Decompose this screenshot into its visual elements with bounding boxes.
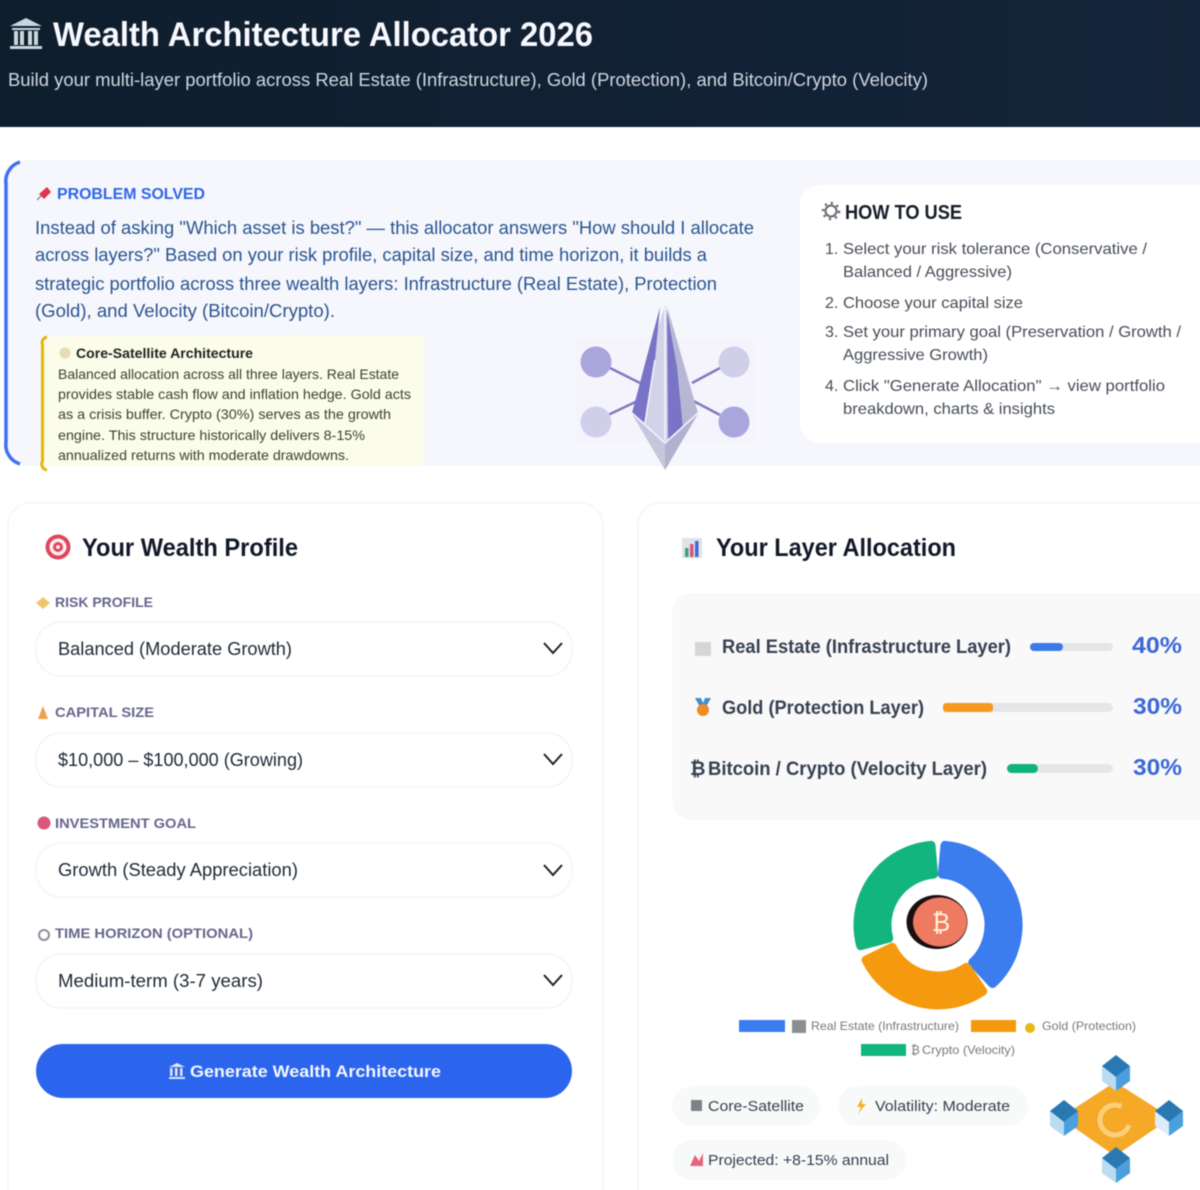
field: time horizon: Medium-term (3-7 years) (58, 971, 263, 991)
field: risk profile: RISK PROFILE (55, 594, 153, 610)
chart legend (739, 1019, 1136, 1057)
problem description: (Gold), and Velocity (Bitcoin/Crypto). (35, 301, 335, 321)
instructions list: 1. (825, 241, 838, 258)
instructions list: Set your primary goal (Preservation / Growth / (843, 324, 1182, 341)
cube: left (1050, 1100, 1078, 1136)
icon: blockchain coin (1050, 1055, 1183, 1183)
field: risk profile (36, 594, 572, 676)
icon: target (46, 534, 70, 560)
field: risk profile: Balanced (Moderate Growth) (58, 639, 292, 659)
panel: problem solved (4, 160, 1200, 470)
callout: core-satellite architecture: as a crisis buffer. Crypto (30%) serves as the growth (58, 406, 391, 422)
subtitle: Build your multi-layer portfolio across Real Estate (Infrastructure), Gold (Protection), and Bitcoin/Crypto (Velocity) (8, 70, 928, 90)
chart legend: Crypto (Velocity) (922, 1043, 1015, 1057)
icon: classical building (10, 18, 42, 49)
tag: volatility (838, 1086, 1028, 1126)
instructions list: Select your risk tolerance (Conservative / (843, 241, 1148, 258)
cube: bottom (1102, 1147, 1130, 1183)
field: investment goal: Growth (Steady Appreciation) (58, 860, 298, 880)
card: how to use (800, 185, 1200, 443)
cube: top (1102, 1055, 1130, 1091)
callout: core-satellite architecture: annualized returns with moderate drawdowns. (58, 447, 349, 463)
tag: projected return: Projected: +8-15% annual (708, 1152, 889, 1169)
bar: gold: 30% (1133, 693, 1182, 719)
field: capital size: CAPITAL SIZE (55, 704, 154, 720)
tag: core-satellite: Core-Satellite (708, 1098, 804, 1115)
instructions list: 3. (825, 324, 838, 341)
callout: core-satellite architecture (41, 336, 424, 470)
chart legend: Gold (Protection) (1042, 1019, 1136, 1033)
page header (0, 0, 1200, 127)
donut chart (858, 845, 1018, 1005)
instructions list: Balanced / Aggressive) (843, 264, 1012, 281)
heading: problem solved: PROBLEM SOLVED (57, 186, 205, 203)
chart legend: Real Estate (Infrastructure) (811, 1019, 959, 1033)
field: capital size: $10,000 – $100,000 (Growing) (58, 750, 303, 770)
instructions list: breakdown, charts & insights (843, 401, 1055, 418)
panel: your wealth profile (8, 503, 603, 1190)
bar: real estate: Real Estate (Infrastructure Layer) (722, 637, 1011, 658)
instructions list: 2. (825, 295, 838, 312)
callout: core-satellite architecture: Balanced allocation across all three layers. Real Estate (58, 366, 399, 382)
heading: how to use: HOW TO USE (845, 202, 962, 224)
instructions list: Click "Generate Allocation" → view portfolio (843, 378, 1165, 395)
bar: bitcoin: 30% (1133, 754, 1182, 780)
instructions list (825, 241, 1182, 418)
icon: pushpin (37, 187, 51, 200)
cube: right (1155, 1100, 1183, 1136)
icon: crystal network (576, 305, 754, 470)
callout: core-satellite architecture: engine. This structure historically delivers 8-15% (58, 427, 365, 443)
bar: bitcoin: ₿ (690, 759, 705, 780)
tag: volatility: Volatility: Moderate (875, 1098, 1010, 1115)
field: time horizon (36, 925, 572, 1008)
bar: gold: Gold (Protection Layer) (722, 698, 924, 719)
field: time horizon: TIME HORIZON (OPTIONAL) (55, 925, 253, 941)
callout: core-satellite architecture: provides stable cash flow and inflation hedge. Gold acts (58, 386, 411, 402)
bar: real estate (695, 632, 1182, 658)
field: investment goal: INVESTMENT GOAL (55, 815, 196, 831)
icon: bar chart (682, 538, 702, 558)
bar: bitcoin (690, 754, 1182, 780)
problem description (35, 218, 754, 321)
bar: gold (695, 693, 1182, 719)
instructions list: 4. (825, 378, 838, 395)
problem description: strategic portfolio across three wealth layers: Infrastructure (Real Estate), Protection (35, 274, 717, 294)
icon: gear (823, 203, 839, 219)
tag: core-satellite (672, 1086, 820, 1126)
bar: bitcoin: Bitcoin / Crypto (Velocity Layer) (708, 759, 987, 780)
title: Wealth Architecture Allocator 2026 (53, 16, 593, 54)
instructions list: Aggressive Growth) (843, 347, 988, 364)
chart legend: ₿ (911, 1043, 920, 1057)
problem description: Instead of asking "Which asset is best?" — this allocator answers "How should I allocate (35, 218, 754, 238)
field: capital size (36, 704, 572, 787)
tag: projected return (672, 1140, 906, 1180)
icon: bitcoin coin: ₿ (932, 909, 950, 937)
button: generate wealth architecture: Generate Wealth Architecture (190, 1062, 441, 1081)
field: investment goal (36, 815, 572, 897)
callout: core-satellite architecture: Core-Satellite Architecture (76, 345, 253, 361)
button: generate wealth architecture (36, 1044, 572, 1098)
allocation bars (672, 593, 1200, 820)
icon: bitcoin coin (906, 895, 968, 949)
problem description: across layers?" Based on your risk profile, capital size, and time horizon, it builds a (35, 245, 708, 265)
instructions list: Choose your capital size (843, 295, 1023, 312)
bar: real estate: 40% (1132, 632, 1182, 658)
panel: your layer allocation (638, 503, 1200, 1190)
heading: your layer allocation: Your Layer Allocation (716, 534, 956, 562)
heading: your wealth profile: Your Wealth Profile (82, 534, 298, 562)
